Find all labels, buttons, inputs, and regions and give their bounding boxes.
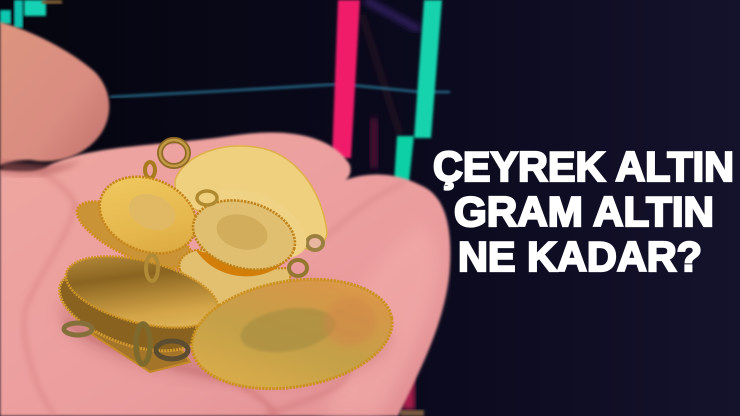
lower palm crease — [65, 320, 276, 416]
icon: large front coin — [184, 266, 400, 402]
top left small candles — [0, 10, 11, 24]
headline line 2: GRAM ALTIN — [454, 188, 714, 235]
title: white bold headline — [433, 143, 734, 280]
whole hand silhouette — [0, 132, 450, 416]
icon: middle coin behind — [220, 189, 306, 258]
blue trend line — [110, 84, 450, 97]
shadow under coins — [56, 256, 394, 394]
icon: ring right — [307, 236, 323, 250]
hand — [0, 22, 450, 416]
icon: ring at lower centre coin — [289, 260, 307, 276]
icon: coin ring top — [160, 140, 188, 166]
finger crease between fingers — [325, 182, 405, 238]
icon: centre coin front — [185, 190, 303, 280]
icon: bottom coin under stack — [90, 325, 190, 372]
icon: ring centre left — [146, 255, 158, 281]
bottom right small candle — [402, 378, 415, 410]
thumb — [0, 22, 109, 165]
icon: centre ring — [197, 191, 217, 205]
icon: left lower coin — [59, 243, 225, 341]
icon: left tilted coin — [69, 188, 201, 282]
icon: lower centre coin — [179, 250, 290, 309]
icon: lower stack coins — [49, 253, 211, 367]
icon: back large coin — [175, 146, 327, 250]
icon: upper left coin — [88, 163, 208, 267]
headline line 1: ÇEYREK ALTIN — [433, 143, 734, 190]
finger highlight right — [320, 225, 439, 416]
headline line 3: NE KADAR? — [458, 233, 702, 280]
icon: coin ring small — [145, 162, 155, 178]
crease right lower — [265, 370, 350, 416]
chart: blurred candlesticks and line — [0, 0, 450, 416]
palm crease shading — [24, 205, 75, 416]
pink candle — [332, 0, 360, 158]
teal candle upper — [414, 0, 442, 138]
icon: bottom left rings — [64, 323, 92, 335]
teal candle lower — [394, 136, 414, 182]
gold coins pile — [49, 140, 400, 402]
